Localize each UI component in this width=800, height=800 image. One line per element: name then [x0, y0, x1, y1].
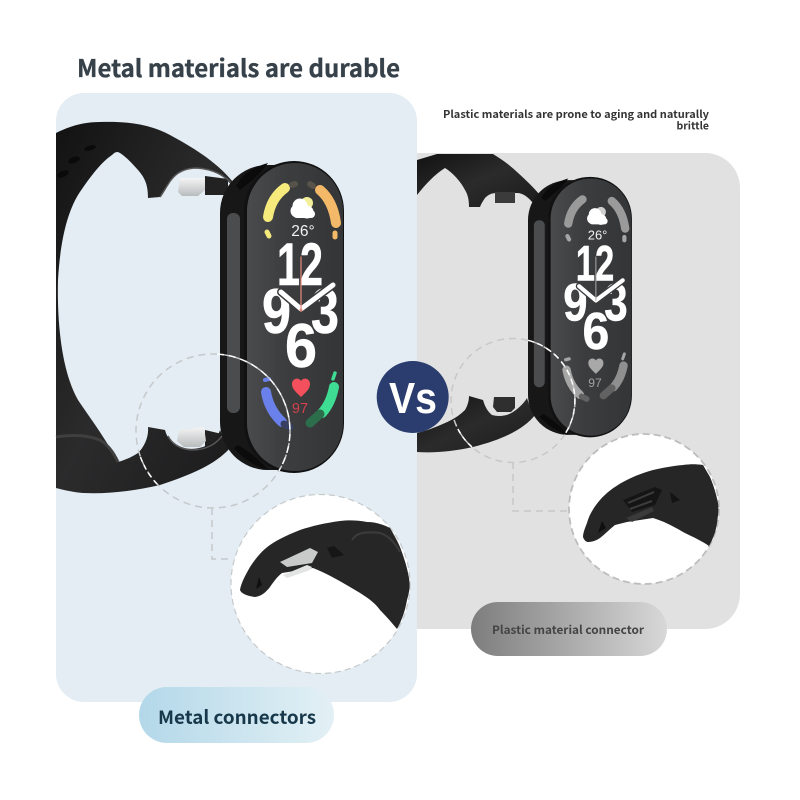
label pill: plastic material connector: Plastic material connector	[492, 622, 645, 638]
strap: upper and back section	[56, 122, 233, 493]
heart rate value: 97	[292, 401, 308, 417]
digits: 12 9 3 6: 3	[604, 274, 628, 332]
icon: cloud	[587, 207, 608, 225]
watch: greyscale face	[528, 177, 632, 437]
connector: lower plastic	[493, 397, 515, 412]
digits: 12 9 3 6: 9	[563, 274, 587, 332]
strap: upper section	[417, 154, 540, 207]
watch screen	[548, 177, 632, 437]
digits: 12 9 3 6: 12	[277, 231, 323, 298]
arcs: grey rings	[566, 199, 625, 399]
digits: 12 9 3 6: 3	[311, 277, 339, 347]
badge: Vs: Vs	[389, 374, 437, 423]
callout: plastic connector close-up	[569, 434, 719, 584]
temperature: 26°	[291, 223, 315, 240]
watch screen	[244, 161, 344, 473]
zoom circle	[569, 434, 719, 584]
strap: inner highlight edges	[56, 168, 233, 462]
plastic tab: highlight	[628, 492, 654, 509]
digits: 12 9 3 6: 6	[582, 302, 609, 360]
badge: Vs	[377, 361, 449, 433]
screen face	[551, 179, 631, 436]
plastic tab: lower	[626, 507, 654, 522]
digits: 12 9 3 6: 9	[262, 277, 291, 347]
connector: upper metal	[178, 178, 205, 196]
icon: cloud	[290, 197, 315, 218]
watch case	[528, 180, 624, 435]
title: metal materials: Metal materials are durable	[77, 49, 400, 84]
strap notch	[670, 492, 680, 503]
strap tip mark	[598, 521, 606, 533]
case side highlight	[227, 213, 240, 413]
zoom circle	[231, 494, 410, 674]
text: plastic materials heading: Plastic materials are prone to aging and naturally	[443, 107, 709, 122]
digits: 12 9 3 6	[262, 231, 339, 381]
case side highlight	[534, 220, 545, 387]
arcs: top fitness rings	[265, 184, 336, 427]
plastic band: full strap with plastic connectors	[417, 154, 540, 452]
clock hands	[579, 257, 623, 300]
strap notch	[327, 546, 344, 558]
metal band: full strap with metal connectors	[56, 122, 233, 493]
digits: 12 9 3 6	[563, 235, 628, 360]
strap slot: top	[541, 179, 568, 201]
icon: heart	[588, 359, 603, 374]
heart rate value: 97	[588, 376, 602, 390]
plastic tabs	[623, 487, 662, 512]
temperature: 26°	[588, 227, 607, 242]
strap: lower section	[417, 396, 535, 452]
metal tab: upper	[280, 548, 318, 567]
zoom strap end	[583, 464, 718, 546]
label pill: metal connectors	[139, 687, 334, 743]
strap: holes	[56, 144, 96, 179]
strap slot: bottom	[540, 414, 568, 435]
strap shading	[352, 532, 400, 552]
zoom strap end	[240, 520, 410, 629]
screen face	[247, 163, 343, 471]
connector: lower metal	[177, 427, 206, 447]
digits: 12 9 3 6: 12	[576, 235, 614, 291]
watch case	[220, 165, 335, 470]
connector: upper plastic	[495, 192, 515, 203]
label pill: plastic material connector	[471, 602, 667, 656]
text: plastic materials heading	[443, 107, 709, 134]
icon: heart	[292, 379, 310, 397]
callout: metal connector close-up	[231, 494, 410, 674]
callout: dashed circle and leader to plastic zoom	[451, 338, 575, 511]
strap slot: bottom	[234, 445, 268, 470]
label pill: metal connectors: Metal connectors	[158, 704, 316, 730]
strap: dark inner parts behind connectors	[205, 176, 228, 449]
text: plastic materials heading: brittle	[676, 118, 709, 134]
metal tab: lower	[283, 565, 312, 578]
digits: 12 9 3 6: 6	[285, 312, 317, 381]
strap slot: top	[236, 163, 268, 190]
callout: dashed circle and leader to metal zoom	[136, 354, 290, 559]
strap tip mark	[256, 577, 262, 589]
panel: metal background	[56, 93, 417, 702]
clock hands	[281, 257, 333, 312]
watch: colored face	[220, 161, 344, 473]
panel: plastic background	[417, 153, 740, 629]
